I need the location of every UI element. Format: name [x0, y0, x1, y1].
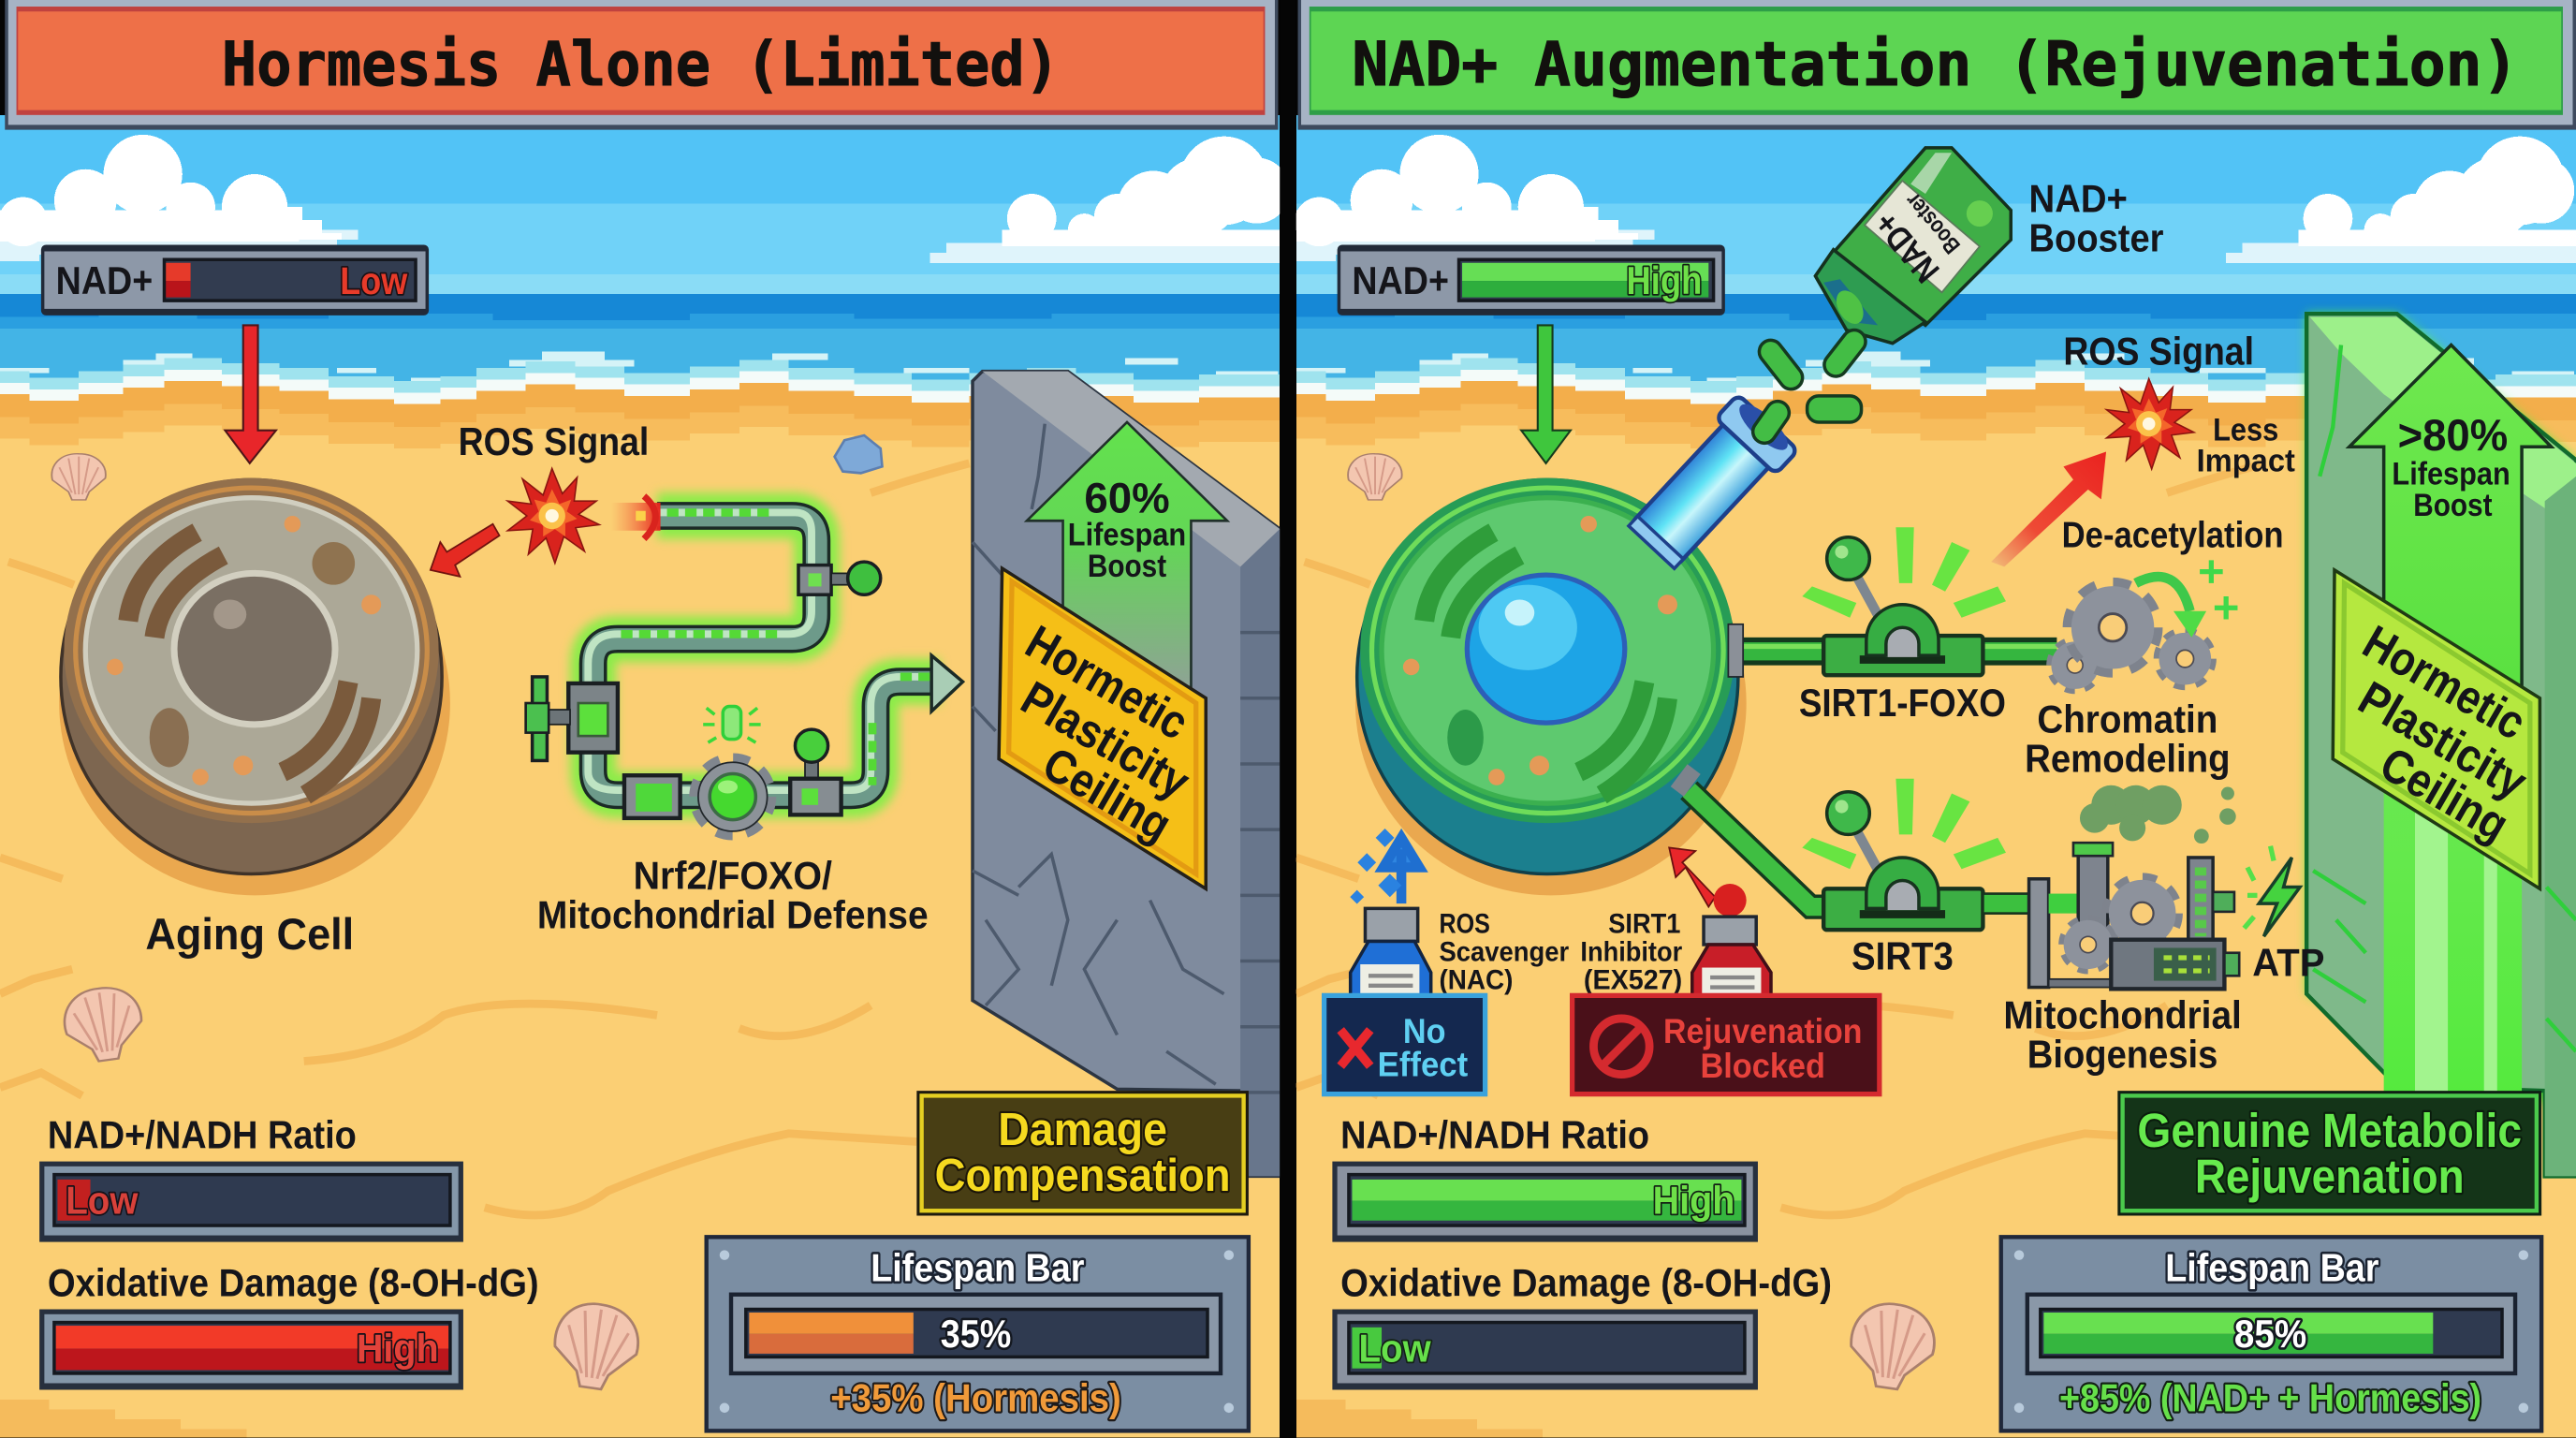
valve: lower right [790, 729, 842, 814]
panel: NAD+ Augmentation [1325, 148, 2576, 1431]
meter: NAD+/NADH high: High [1653, 1179, 1734, 1223]
label: NAD+ booster: NAD+ [2029, 177, 2128, 220]
callout: no effect: No [1403, 1012, 1445, 1050]
callout: genuine rejuvenation [2117, 1091, 2541, 1215]
sand ripples [0, 463, 970, 1215]
heading: NAD+ Augmentation (Rejuvenation): NAD+ Augmentation (Rejuvenation) [1352, 30, 2519, 100]
valve: left [526, 677, 618, 760]
stone wall [973, 372, 1280, 1176]
sign: plasticity ceiling: Hormetic [2354, 615, 2535, 750]
valve: arrow head [931, 655, 962, 712]
cell: aging [59, 478, 450, 895]
meter: NAD+/NADH high [1332, 1114, 1758, 1242]
panel: lifespan bar 35%: 35% [941, 1312, 1011, 1356]
arrow: ROS into cell [431, 524, 500, 577]
callout: damage compensation: Damage [998, 1105, 1167, 1155]
meter: oxidative damage low: Low [1358, 1327, 1431, 1371]
label: ROS scavenger [1439, 909, 1569, 995]
icon: mitochondrial machine [1983, 785, 2239, 989]
heading: Hormesis Alone (Limited): Hormesis Alone (Limited) [222, 30, 1060, 100]
label: NAD+ booster: Booster [2029, 216, 2163, 259]
icon: pills [1749, 326, 1870, 448]
icon: blue shell [835, 435, 882, 473]
label: less impact: Impact [2197, 444, 2295, 479]
valve: lower left [624, 775, 681, 818]
sign: plasticity ceiling: Ceiling [1034, 737, 1180, 852]
divider [1280, 0, 1296, 1437]
label: SIRT1 inhibitor: SIRT1 [1608, 909, 1680, 940]
sand corner patch [0, 1400, 246, 1437]
meter: NAD+/NADH high: NAD+/NADH Ratio [1340, 1114, 1649, 1157]
organelle: golgi upper [128, 533, 224, 638]
label: ROS signal: ROS Signal [459, 420, 649, 463]
label: chromatin remodeling: Chromatin [2037, 698, 2217, 741]
bottle label: Booster [1900, 187, 1966, 258]
sand ripples [1296, 463, 2265, 1215]
sand corner patch [1296, 1400, 1543, 1437]
label: ROS scavenger: (NAC) [1439, 964, 1513, 995]
sign: plasticity ceiling: Hormetic [1017, 615, 1197, 750]
meter: oxidative damage low [1332, 1261, 1832, 1389]
scene: beach background, right panel [1295, 115, 2576, 1437]
shell: lower [549, 1299, 643, 1393]
arrow: lifespan boost: >80% [2398, 411, 2508, 461]
cell: rejuvenated [1355, 478, 1747, 895]
gauge: NAD+ low: NAD+ [56, 258, 153, 302]
callout: rejuvenation blocked: Blocked [1701, 1047, 1825, 1085]
label: mitochondrial defense: Mitochondrial Defense [537, 893, 929, 936]
icon: ATP lightning [2244, 846, 2300, 936]
label: mitochondrial biogenesis: Biogenesis [2027, 1034, 2217, 1077]
callout: rejuvenation blocked: Rejuvenation [1663, 1012, 1862, 1050]
gauge: NAD+ low: Low [340, 259, 408, 302]
crystal wall [2306, 314, 2576, 1176]
icon: ROS burst [507, 468, 599, 564]
sign: plasticity ceiling: Plasticity [2349, 670, 2537, 809]
cloud right [929, 137, 1290, 263]
gauge: NAD+ high: High [1627, 258, 1702, 302]
heading: NAD+ Augmentation (Rejuvenation) [1298, 0, 2576, 130]
label: chromatin remodeling: Remodeling [2025, 738, 2231, 781]
callout: genuine rejuvenation: Rejuvenation [2195, 1150, 2465, 1203]
label: mitochondrial biogenesis [2003, 993, 2242, 1077]
icon: red inhibitor bottle [1669, 847, 1771, 997]
label: Nrf2/FOXO: Nrf2/FOXO/ [634, 854, 832, 897]
icon: green lamp [703, 707, 761, 742]
valve: upper [798, 562, 881, 594]
bottle label [1865, 181, 1980, 292]
callout: rejuvenation blocked [1573, 995, 1880, 1094]
panel: lifespan bar 85% [2001, 1237, 2541, 1431]
callout: damage compensation: Compensation [935, 1151, 1231, 1201]
switch: SIRT3 [1802, 779, 2006, 930]
icon: blue ROS scavenger bottle [1350, 829, 1431, 997]
pipe: cell to SIRT1 [1728, 624, 2056, 677]
icon: glass tube [1621, 390, 1802, 575]
label: SIRT1 inhibitor: Inhibitor [1580, 937, 1683, 968]
callout: no effect [1325, 995, 1486, 1094]
callout: damage compensation [916, 1091, 1249, 1215]
arrow: NAD+ to cell [225, 325, 276, 463]
label: SIRT1-FOXO: SIRT1-FOXO [1799, 682, 2006, 725]
label: aging cell: Aging Cell [145, 910, 354, 960]
scene: beach background, left panel [0, 115, 1290, 1437]
shell: upper [1348, 454, 1402, 500]
pipeline: Nrf2 defense [526, 496, 962, 831]
organelle: golgi lower [1579, 682, 1667, 795]
panel: lifespan bar 35%: Lifespan Bar [871, 1246, 1084, 1290]
label: SIRT1 inhibitor [1580, 909, 1683, 995]
shell: upper [51, 454, 106, 500]
panel: lifespan bar 85%: 85% [2234, 1312, 2306, 1356]
icon: red flare at pipe inlet [611, 496, 661, 539]
label: chromatin remodeling [2025, 698, 2231, 781]
label: less impact: Less [2213, 412, 2278, 448]
label: ROS scavenger: Scavenger [1439, 937, 1569, 968]
callout: genuine rejuvenation: Genuine Metabolic [2137, 1104, 2522, 1157]
gauge: NAD+ low [41, 244, 429, 315]
label: SIRT1 inhibitor: (EX527) [1584, 964, 1682, 995]
arrow: lifespan boost: 60% [1084, 474, 1170, 521]
callout: no effect: Effect [1378, 1045, 1468, 1083]
arrow: lifespan boost [1027, 422, 1227, 690]
meter: oxidative damage high: Oxidative Damage (8-OH-dG) [48, 1261, 539, 1304]
nucleus [1467, 575, 1625, 723]
gauge: NAD+ high: NAD+ [1352, 258, 1449, 302]
gear with green core [698, 762, 768, 831]
arrow: lifespan boost: Lifespan [1068, 518, 1186, 553]
organelle: golgi lower [283, 682, 372, 795]
icon: chromatin gears [2051, 560, 2237, 689]
arrow: lifespan boost: Boost [1088, 549, 1166, 584]
panel: lifespan bar 85%: Lifespan Bar [2165, 1246, 2378, 1290]
panel: lifespan bar 85%: +85% (NAD+ + Hormesis) [2059, 1375, 2481, 1419]
nucleus [174, 573, 335, 725]
icon: booster bottle [1815, 148, 2011, 344]
panel: lifespan bar 35%: +35% (Hormesis) [830, 1375, 1121, 1419]
meter: oxidative damage low: Oxidative Damage (8-OH-dG) [1340, 1261, 1832, 1304]
label: mitochondrial biogenesis: Mitochondrial [2003, 993, 2242, 1036]
cloud right [2226, 137, 2576, 263]
meter: NAD+/NADH low [39, 1114, 463, 1242]
sign: plasticity ceiling: Plasticity [1013, 670, 1199, 809]
meter: oxidative damage high: High [357, 1327, 439, 1371]
shell: middle [60, 983, 146, 1065]
arrow: lifespan boost: Lifespan [2392, 457, 2510, 492]
meter: oxidative damage high [39, 1261, 539, 1389]
shell: lower [1845, 1299, 1939, 1393]
meter: NAD+/NADH low: Low [66, 1179, 139, 1223]
arrow: lifespan boost [2349, 345, 2552, 723]
label: de-acetylation: De-acetylation [2062, 515, 2284, 555]
sign: plasticity ceiling [2333, 570, 2539, 888]
heading: Hormesis Alone (Limited) [5, 0, 1278, 130]
pipe: cell to SIRT3 [1679, 775, 1832, 907]
bottle label: NAD+ [1866, 205, 1947, 290]
panel: lifespan bar 35% [707, 1237, 1249, 1431]
label: SIRT3: SIRT3 [1852, 934, 1954, 977]
label: NAD+ booster [2029, 177, 2163, 259]
sign: plasticity ceiling: Ceiling [2371, 737, 2518, 852]
sign: plasticity ceiling [999, 568, 1206, 888]
icon: ROS burst [2106, 378, 2194, 469]
organelle: golgi upper [1425, 533, 1519, 638]
cloud left [1295, 135, 1654, 261]
label: ATP: ATP [2252, 941, 2324, 984]
cloud left [0, 135, 359, 261]
gauge: NAD+ high [1338, 244, 1725, 315]
arrow: lifespan boost: Boost [2413, 488, 2492, 523]
label: less impact [2197, 412, 2295, 479]
meter: NAD+/NADH low: NAD+/NADH Ratio [48, 1114, 357, 1157]
label: ROS signal: ROS Signal [2063, 330, 2254, 374]
arrow: NAD+ to cell [1521, 325, 1571, 463]
arrow: de-acetylation [1991, 452, 2106, 566]
label: ROS scavenger: ROS [1439, 909, 1490, 940]
switch: SIRT1-FOXO [1802, 527, 2006, 675]
